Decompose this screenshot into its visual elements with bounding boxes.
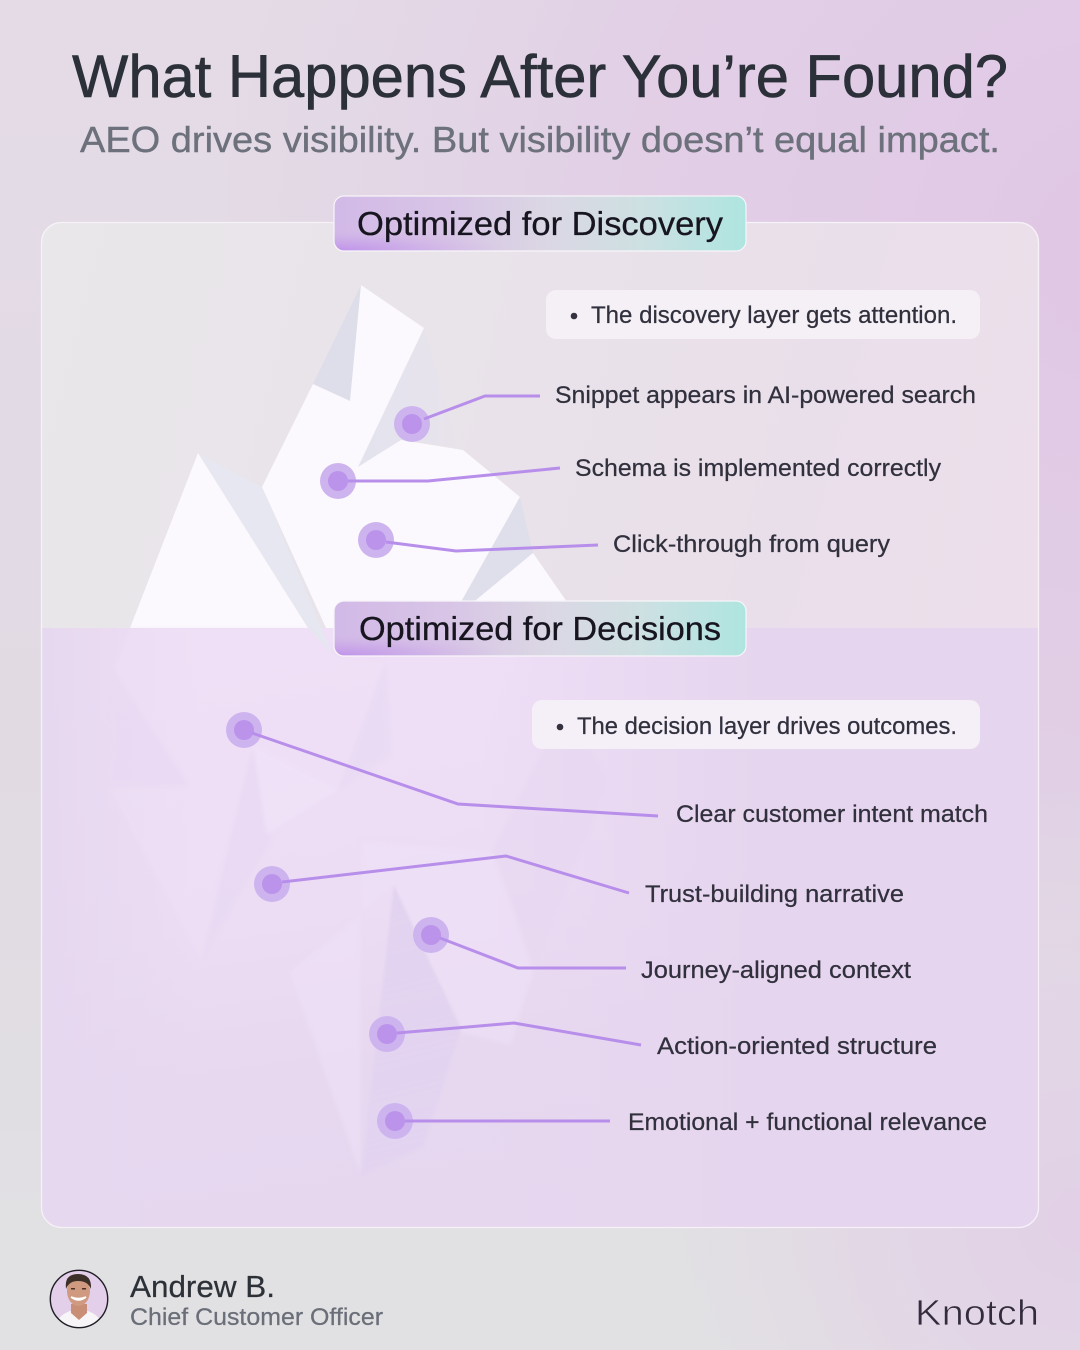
marker: journey-aligned — [413, 917, 911, 984]
panel: above water background — [41, 222, 1039, 628]
marker: action-oriented: Action-oriented structure — [657, 1033, 937, 1060]
marker: action-oriented — [369, 1016, 937, 1060]
marker: emotional relevance: Emotional + functional relevance — [628, 1109, 987, 1136]
marker: customer intent — [226, 712, 988, 828]
marker: emotional relevance — [377, 1103, 987, 1139]
iceberg: above water — [130, 285, 585, 656]
heading badge: Optimized for Decisions — [334, 601, 746, 656]
panel: below water background — [41, 628, 1039, 1228]
marker: schema: Schema is implemented correctly — [575, 455, 942, 482]
marker: snippet: Snippet appears in AI-powered search — [555, 382, 976, 409]
marker: snippet — [394, 382, 976, 442]
heading badge: Optimized for Discovery: Optimized for Discovery — [357, 206, 723, 243]
marker: trust-building — [254, 856, 904, 908]
author name: Andrew B. — [130, 1269, 275, 1304]
icon: author portrait — [50, 1270, 108, 1332]
panel outline — [42, 222, 1038, 1228]
iceberg: submerged facet — [388, 892, 435, 982]
iceberg: below water reflection — [109, 628, 606, 1176]
marker: customer intent: Clear customer intent match — [676, 801, 988, 828]
callout: discovery layer: The discovery layer gets attention. — [591, 302, 957, 329]
marker: trust-building: Trust-building narrative — [645, 881, 904, 908]
callout: decision layer: The decision layer drives outcomes. — [577, 713, 957, 740]
author role: Chief Customer Officer — [130, 1304, 383, 1331]
logo: Knotch: Knotch — [915, 1292, 1039, 1333]
title: What Happens After You’re Found? — [72, 42, 1008, 110]
marker: journey-aligned: Journey-aligned context — [641, 957, 911, 984]
panel: iceberg diagram — [41, 222, 1039, 1228]
callout: decision layer — [532, 700, 980, 749]
marker: click-through: Click-through from query — [613, 531, 891, 558]
marker: click-through — [358, 522, 891, 558]
callout: discovery layer — [546, 290, 980, 339]
heading badge: Optimized for Discovery — [334, 196, 746, 251]
heading badge: Optimized for Decisions: Optimized for Decisions — [359, 611, 721, 648]
subtitle: AEO drives visibility. But visibility doesn’t equal impact. — [80, 119, 1000, 160]
marker: schema — [320, 455, 942, 499]
